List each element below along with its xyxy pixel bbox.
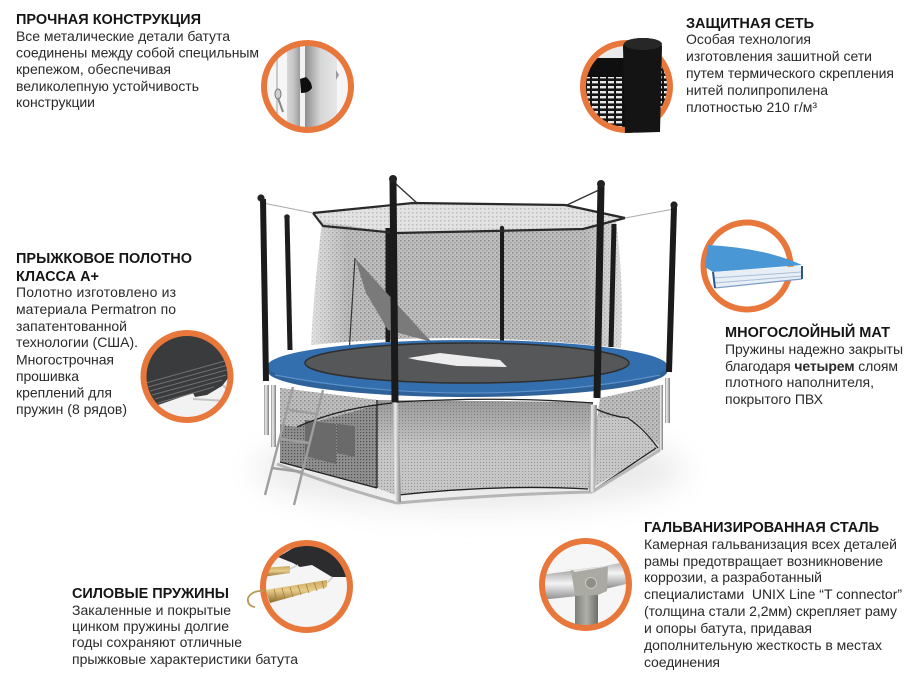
heading: ГАЛЬВАНИЗИРОВАННАЯ СТАЛЬ bbox=[644, 520, 879, 536]
body text: изготовления зашитной сети bbox=[686, 48, 872, 64]
back skirt wall, right bbox=[597, 385, 660, 447]
trampoline illustration bbox=[257, 175, 678, 505]
body text: плотностью 210 г/м³ bbox=[686, 99, 817, 115]
body text: Многострочная bbox=[16, 352, 114, 368]
body text: Камерная гальванизация всех деталей bbox=[644, 536, 897, 552]
skirt edges bbox=[280, 399, 658, 495]
heading: СИЛОВЫЕ ПРУЖИНЫ bbox=[72, 586, 229, 602]
body text: пружин (8 рядов) bbox=[16, 401, 127, 417]
body text: (толщина стали 2,2мм) скрепляет раму bbox=[644, 603, 897, 619]
body text: коррозии, а разработанный bbox=[644, 569, 822, 585]
heading: КЛАССА А+ bbox=[16, 269, 99, 285]
body text: специалистами UNIX Line “T connector” bbox=[644, 586, 902, 602]
body text: годы сохраняют отличные bbox=[72, 634, 242, 650]
body text: Все металические детали батута bbox=[16, 28, 230, 44]
steel legs bbox=[264, 378, 670, 502]
icon: steel pipe clamp bbox=[262, 40, 354, 135]
pole caps bbox=[257, 175, 678, 209]
body text: плотного наполнителя, bbox=[725, 374, 874, 390]
front skirt top shade bbox=[377, 400, 593, 496]
blue padded ring top bbox=[268, 340, 668, 392]
body text: Особая технология bbox=[686, 31, 811, 47]
body text: благодаря четырем слоям bbox=[725, 358, 898, 374]
callout: multilayer pad bbox=[704, 222, 903, 407]
heading: ПРЫЖКОВОЕ ПОЛОТНО bbox=[16, 251, 192, 267]
body text bbox=[686, 31, 894, 115]
body text: великолепную устойчивость bbox=[16, 78, 199, 94]
body text bbox=[72, 602, 298, 667]
callout: jumping mat fabric bbox=[16, 251, 236, 423]
body text: технологии (США). bbox=[16, 334, 138, 350]
mat logo bbox=[408, 353, 507, 367]
icon: gold springs bbox=[248, 540, 354, 634]
body text: прошивка bbox=[16, 368, 79, 384]
entry door flap bbox=[355, 258, 432, 342]
body text: рамы предотвращает возникновение bbox=[644, 553, 883, 569]
icon: stitched mat bbox=[140, 330, 236, 423]
body text: Полотно изготовлено из bbox=[16, 284, 176, 300]
ladder bbox=[265, 387, 323, 505]
body text bbox=[16, 284, 176, 417]
net top ring bbox=[313, 203, 625, 233]
body text: цинком пружины долгие bbox=[72, 618, 229, 634]
body text bbox=[16, 28, 259, 110]
body text: соединены между собой специльным bbox=[16, 44, 259, 60]
blue padded ring side bbox=[268, 345, 668, 397]
front skirt net bbox=[377, 400, 593, 496]
heading bbox=[16, 251, 192, 285]
window panels in back skirt bbox=[305, 420, 355, 464]
callout: galvanized steel bbox=[538, 520, 902, 670]
body text: Пружины надежно закрыты bbox=[725, 341, 903, 357]
callout: safety net bbox=[583, 16, 894, 133]
body text: путем термического скрепления bbox=[686, 65, 894, 81]
icon: net and padded pole bbox=[583, 38, 672, 133]
body text: нитей полипропилена bbox=[686, 82, 828, 98]
body text: соединения bbox=[644, 654, 720, 670]
body text: крепежом, обеспечивая bbox=[16, 61, 171, 77]
body text: дополнительную жесткость в местах bbox=[644, 637, 882, 653]
net edge fade bbox=[311, 222, 622, 348]
icon: pad cross-section bbox=[704, 222, 802, 310]
body text: конструкции bbox=[16, 94, 95, 110]
body text: материала Permatron по bbox=[16, 301, 176, 317]
upper safety net bbox=[311, 222, 622, 348]
body text: прыжковые характеристики батута bbox=[72, 651, 298, 667]
callout: strong construction bbox=[16, 12, 354, 135]
body text: запатентованной bbox=[16, 318, 127, 334]
callout: power springs bbox=[72, 540, 354, 667]
heading: ЗАЩИТНАЯ СЕТЬ bbox=[686, 16, 814, 32]
ring highlight bbox=[275, 375, 660, 393]
back skirt net, left bbox=[280, 388, 377, 488]
body text bbox=[644, 536, 902, 670]
icon: T connector bbox=[538, 538, 635, 634]
front poles bbox=[263, 180, 674, 402]
light upper back net bbox=[280, 388, 377, 427]
heading: ПРОЧНАЯ КОНСТРУКЦИЯ bbox=[16, 12, 201, 28]
jumping mat bbox=[305, 343, 629, 383]
heading: МНОГОСЛОЙНЫЙ МАТ bbox=[725, 323, 890, 341]
rear net poles bbox=[287, 218, 614, 350]
floor shadow bbox=[255, 432, 685, 508]
body text bbox=[725, 341, 903, 407]
guy wires bbox=[263, 203, 674, 218]
body text: покрытого ПВХ bbox=[725, 391, 824, 407]
top strip of safety net bbox=[313, 203, 625, 233]
body text: креплений для bbox=[16, 384, 112, 400]
body text: Закаленные и покрытые bbox=[72, 602, 231, 618]
back skirt floor, right bbox=[592, 418, 660, 488]
body text: и опоры батута, придавая bbox=[644, 620, 812, 636]
steel bottom frame bbox=[277, 450, 660, 503]
